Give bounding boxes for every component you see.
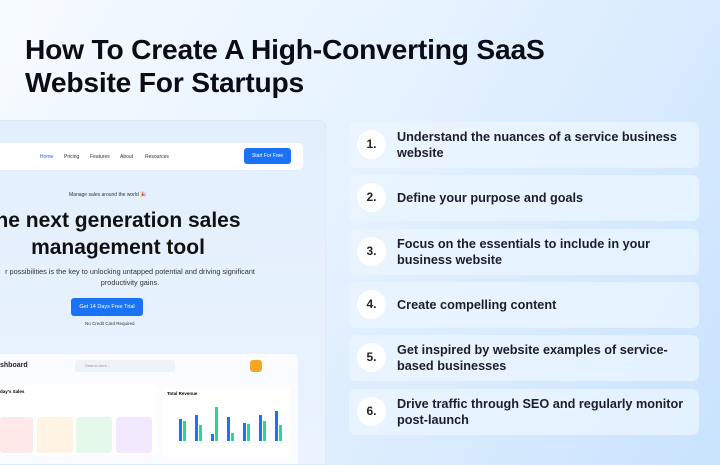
title: Website For Startups	[25, 66, 304, 98]
panel: website screenshot: r possibilities is the key to unlocking untapped potential and driving significant	[5, 267, 255, 276]
nav bar: Pricing	[64, 154, 79, 160]
revenue chart	[162, 387, 290, 457]
step 4: Create compelling content	[397, 298, 556, 312]
nav button: Start For Free	[252, 153, 283, 159]
dashboard: shboard	[0, 362, 28, 369]
step 2: 2.	[366, 190, 376, 204]
step 1	[349, 122, 699, 168]
step 1: 1.	[366, 137, 376, 151]
panel: website screenshot: management tool	[31, 236, 205, 259]
step 2	[349, 175, 699, 221]
nav bar: Resources	[145, 154, 169, 160]
dashboard: Search here...	[85, 363, 110, 368]
step 2: Define your purpose and goals	[397, 191, 583, 205]
nav bar: Home	[40, 154, 53, 160]
panel: website screenshot: productivity gains.	[101, 278, 159, 287]
sales summary: day's Sales	[0, 389, 24, 394]
title: How To Create A High-Converting SaaS	[25, 33, 545, 65]
nav button	[244, 148, 291, 164]
step 3: Focus on the essentials to include in your business website	[397, 236, 650, 267]
panel: website screenshot: he next generation sales	[0, 209, 241, 232]
step 5	[349, 335, 699, 381]
nav bar: Features	[90, 154, 110, 160]
step 6	[349, 389, 699, 435]
panel: website screenshot: No Credit Card Required	[85, 321, 135, 326]
step 6: 6.	[366, 404, 376, 418]
hero text: Manage sales around the world 🎉	[69, 192, 146, 198]
step 3: 3.	[366, 244, 376, 258]
step 3	[349, 229, 699, 275]
panel: website screenshot	[0, 120, 326, 465]
title	[25, 33, 545, 98]
step 6: Drive traffic through SEO and regularly monitor post-launch	[397, 396, 683, 427]
hero button	[71, 298, 143, 316]
nav bar: About	[120, 154, 133, 160]
revenue chart: Total Revenue	[167, 391, 197, 396]
step 5: Get inspired by website examples of service-based businesses	[397, 342, 668, 373]
step 5: 5.	[366, 350, 376, 364]
hero button: Get 14 Days Free Trial	[79, 304, 135, 310]
nav bar	[0, 143, 303, 170]
step 1: Understand the nuances of a service business website	[397, 130, 677, 160]
sales summary	[0, 385, 157, 455]
step 4: 4.	[366, 297, 376, 311]
dashboard	[0, 354, 298, 465]
step 4	[349, 282, 699, 328]
